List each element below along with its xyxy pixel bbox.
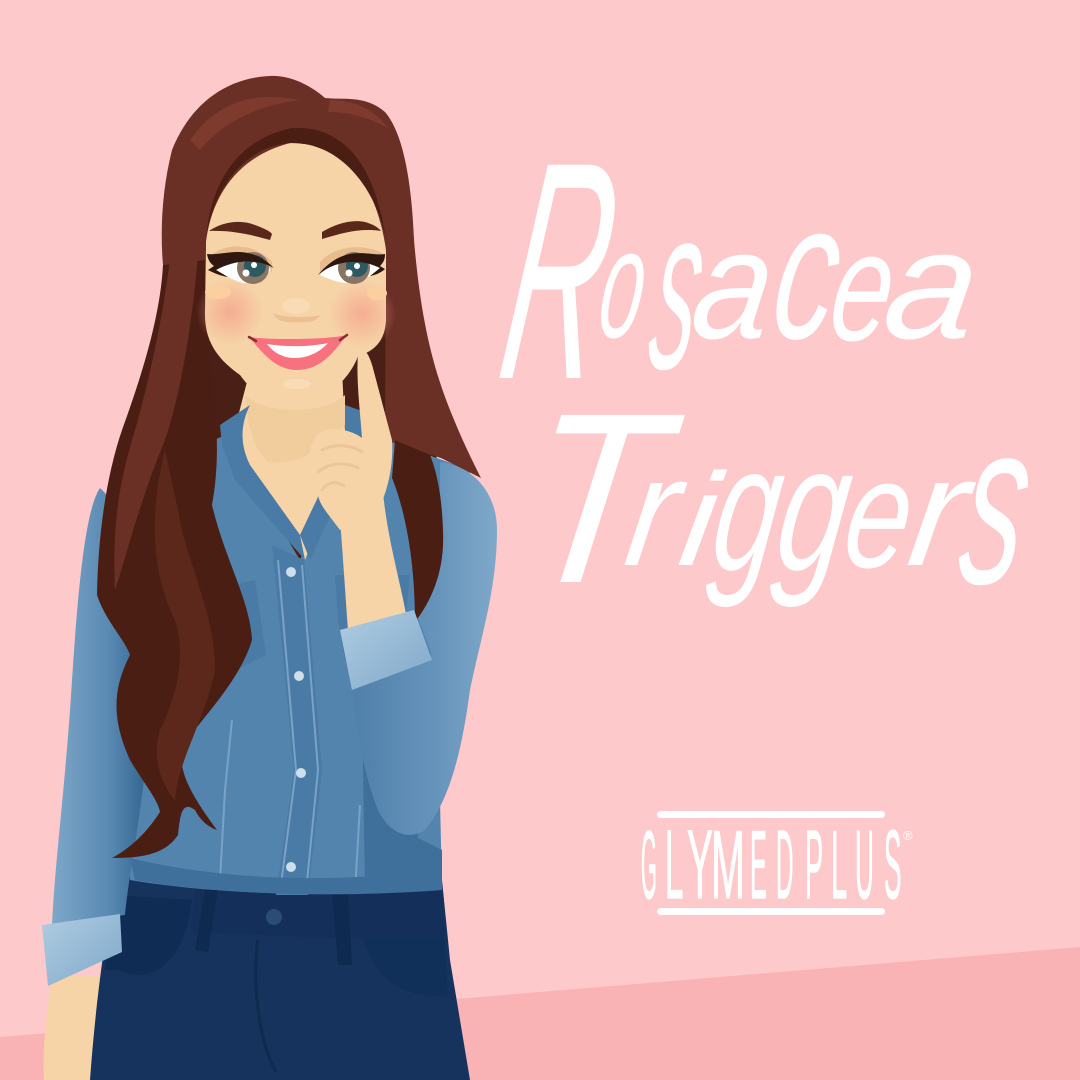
floor band <box>0 947 1080 1080</box>
character <box>42 76 497 1080</box>
title line 2: e <box>835 428 924 601</box>
placket seams <box>220 560 360 892</box>
title line 1: a <box>875 197 990 371</box>
top hair <box>162 76 414 265</box>
left long hair <box>97 150 252 858</box>
logo wordmark: D <box>776 810 794 919</box>
eyeliner <box>207 252 274 277</box>
back hair <box>200 180 445 640</box>
title line 2 <box>508 363 1047 634</box>
title line 2: s <box>948 372 1047 633</box>
left pocket <box>105 895 192 975</box>
shirt torso <box>105 410 470 894</box>
right eye <box>318 247 385 284</box>
right chest pocket <box>335 575 410 660</box>
right hair lower strand <box>392 440 443 622</box>
nose highlight <box>282 298 310 314</box>
collar left <box>220 405 305 560</box>
neck shadow <box>245 395 345 462</box>
title line 2: g <box>703 410 795 609</box>
left eye <box>207 247 274 284</box>
right pocket <box>362 895 448 996</box>
logo top bar <box>657 811 885 818</box>
forearm <box>338 480 406 630</box>
shirt placket <box>272 545 322 895</box>
highlights <box>251 262 257 268</box>
left cheek light <box>205 285 231 299</box>
title line 2: i <box>672 446 731 593</box>
logo wordmark: P <box>805 812 823 920</box>
title line 2: r <box>617 425 696 599</box>
title line 1: e <box>821 200 906 373</box>
teeth <box>267 343 328 358</box>
highlights <box>354 263 360 269</box>
jeans <box>90 870 470 1080</box>
title line 2: g <box>767 409 864 608</box>
title line 1: R <box>486 99 635 445</box>
face <box>205 143 386 408</box>
collar right <box>300 405 365 560</box>
logo wordmark: Y <box>687 810 713 919</box>
logo wordmark: L <box>665 811 683 919</box>
eye socket <box>212 247 272 272</box>
mouth <box>249 335 347 370</box>
registered mark: ® <box>903 828 913 843</box>
logo: GlyMed Plus <box>641 810 913 920</box>
hair part shadow <box>206 128 386 240</box>
neck and chest skin <box>232 370 360 560</box>
mouth line <box>249 335 347 341</box>
eyeliner <box>318 253 385 276</box>
fly seam <box>256 940 276 1072</box>
left eyebrow <box>209 222 272 240</box>
right cheek light <box>367 286 387 300</box>
left cuff <box>42 914 122 986</box>
shirt hem <box>130 858 442 894</box>
jeans button <box>266 909 282 925</box>
right cuff <box>340 610 432 690</box>
left hair lower strand <box>155 450 215 800</box>
logo wordmark: S <box>884 812 901 920</box>
left sleeve <box>52 488 150 925</box>
logo wordmark <box>641 810 901 920</box>
right blush <box>328 280 396 348</box>
iris <box>237 252 269 284</box>
eye socket <box>320 247 384 272</box>
left hand and wrist <box>44 975 104 1080</box>
pupil <box>346 255 368 277</box>
title line 1: o <box>590 198 658 371</box>
belt loops <box>195 890 352 965</box>
logo wordmark: G <box>641 811 657 919</box>
iris <box>338 252 370 284</box>
title line 1: c <box>762 163 855 379</box>
left chest pocket <box>195 580 266 668</box>
right long hair <box>372 135 481 478</box>
title line 2: r <box>900 424 985 598</box>
title: Rosacea Triggers <box>486 99 1047 634</box>
hand with pointing finger <box>308 350 392 530</box>
title line 1: a <box>683 199 785 371</box>
lips <box>249 335 347 370</box>
eye white <box>320 257 380 283</box>
right eyebrow <box>322 221 381 239</box>
left blush <box>196 278 264 346</box>
shirt buttons <box>286 567 306 872</box>
left hair highlights <box>114 210 200 590</box>
shirt shadow under arm <box>362 690 442 892</box>
eye white <box>216 259 271 283</box>
hair strand highlight <box>190 97 388 150</box>
chin highlight <box>283 379 311 389</box>
logo wordmark: L <box>831 811 847 920</box>
logo wordmark: M <box>711 811 745 919</box>
nose <box>273 313 320 322</box>
right sleeve <box>352 462 497 835</box>
logo bottom bar <box>657 908 885 915</box>
title line 1 <box>486 99 990 445</box>
waistband <box>190 888 444 940</box>
title line 2: T <box>508 363 692 634</box>
finger shadow lines <box>318 446 362 490</box>
title line 1: s <box>638 157 720 418</box>
pupil <box>244 255 266 277</box>
logo wordmark: E <box>750 812 767 920</box>
logo wordmark: U <box>855 812 874 920</box>
